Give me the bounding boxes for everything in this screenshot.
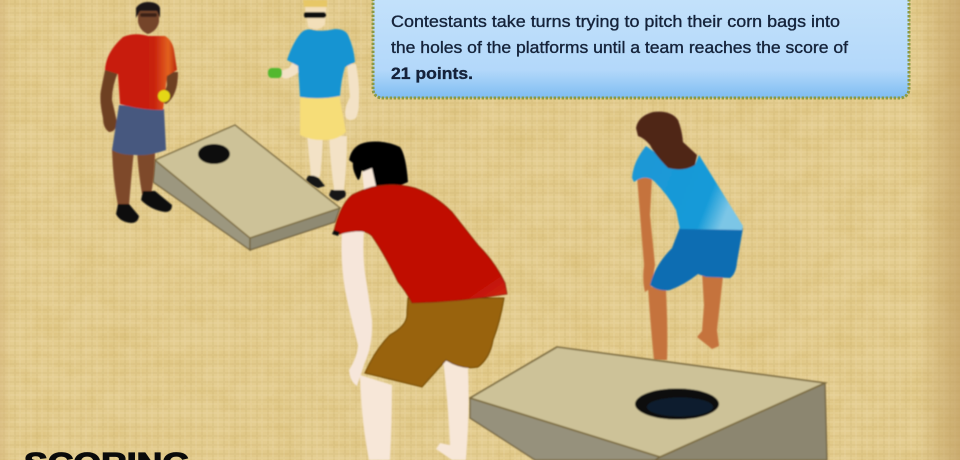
- hole: [635, 388, 719, 420]
- rules text: [391, 12, 848, 83]
- small cornhole platform: [153, 125, 340, 250]
- player: woman in blue shirt: [632, 112, 743, 360]
- rules text: the holes of the platforms until a team reaches the score of: [391, 38, 848, 57]
- rules text: Contestants take turns trying to pitch their corn bags into: [391, 12, 840, 31]
- large cornhole platform: [470, 347, 827, 460]
- corn bag: yellow: [158, 90, 170, 102]
- player: man in blue shirt: [268, 0, 359, 201]
- player: man in red shirt, foreground: [332, 142, 507, 460]
- hole: [198, 144, 230, 164]
- rules text: 21 points.: [391, 64, 473, 83]
- callout panel: rules text: [373, 0, 909, 98]
- player: man in red shirt, left: [100, 2, 178, 223]
